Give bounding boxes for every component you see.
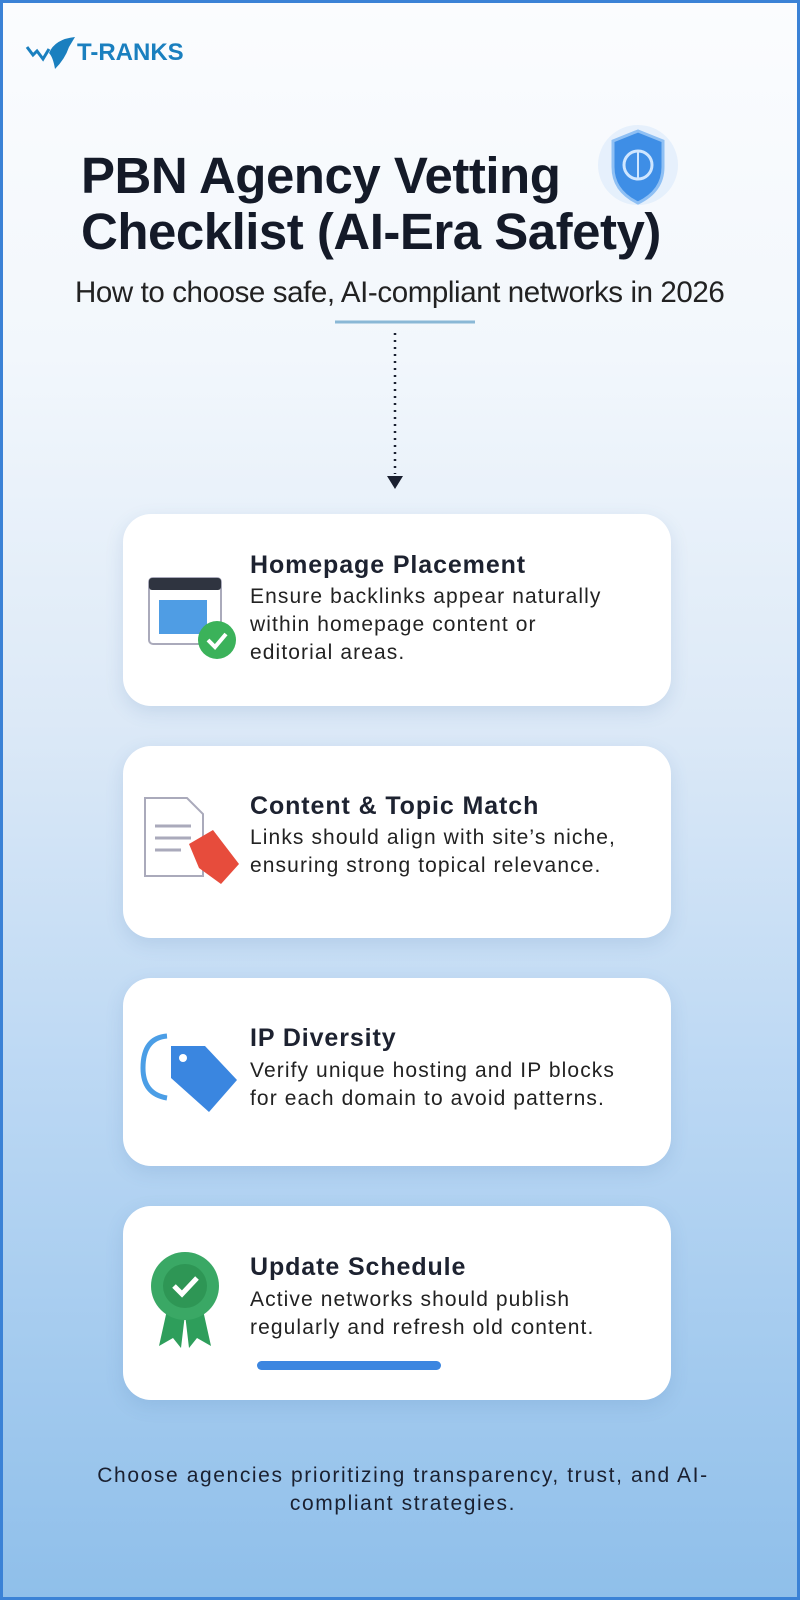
panel: content & topic match: ensuring strong topical relevance. [250,854,601,877]
footer text: Choose agencies prioritizing transparency, trust, and AI- [97,1464,709,1487]
panel: homepage placement: Homepage Placement [250,551,526,579]
panel: content & topic match [123,746,671,938]
panel: homepage placement: Ensure backlinks appear naturally [250,585,601,608]
title: PBN Agency Vetting [81,147,560,204]
panel: IP diversity: Verify unique hosting and IP blocks [250,1059,615,1082]
panel: IP diversity: IP Diversity [250,1024,397,1052]
panel: update schedule: Active networks should publish [250,1288,570,1311]
panel: homepage placement [123,514,671,706]
footer text [97,1464,709,1515]
panel: homepage placement: within homepage content or [250,613,537,636]
title [81,147,661,260]
icon: blue tag [140,1034,237,1112]
panel: content & topic match: Links should align with site’s niche, [250,826,616,849]
panel: update schedule [123,1206,671,1400]
panel: IP diversity [123,978,671,1166]
icon: shield brain [598,125,678,205]
arrow [335,320,475,489]
logo [26,37,184,69]
panel: homepage placement: editorial areas. [250,641,405,664]
logo: T-RANKS [77,39,184,66]
icon: document tag [144,797,239,884]
panel: IP diversity: for each domain to avoid patterns. [250,1087,605,1110]
panel: update schedule: regularly and refresh old content. [250,1316,594,1339]
subtitle: How to choose safe, AI-compliant networks in 2026 [75,276,724,309]
footer text: compliant strategies. [290,1492,516,1515]
icon: badge check [151,1252,219,1348]
panel: update schedule: Update Schedule [250,1253,466,1281]
panel: content & topic match: Content & Topic Match [250,792,539,820]
title: Checklist (AI-Era Safety) [81,203,661,260]
icon: browser check [148,577,236,659]
